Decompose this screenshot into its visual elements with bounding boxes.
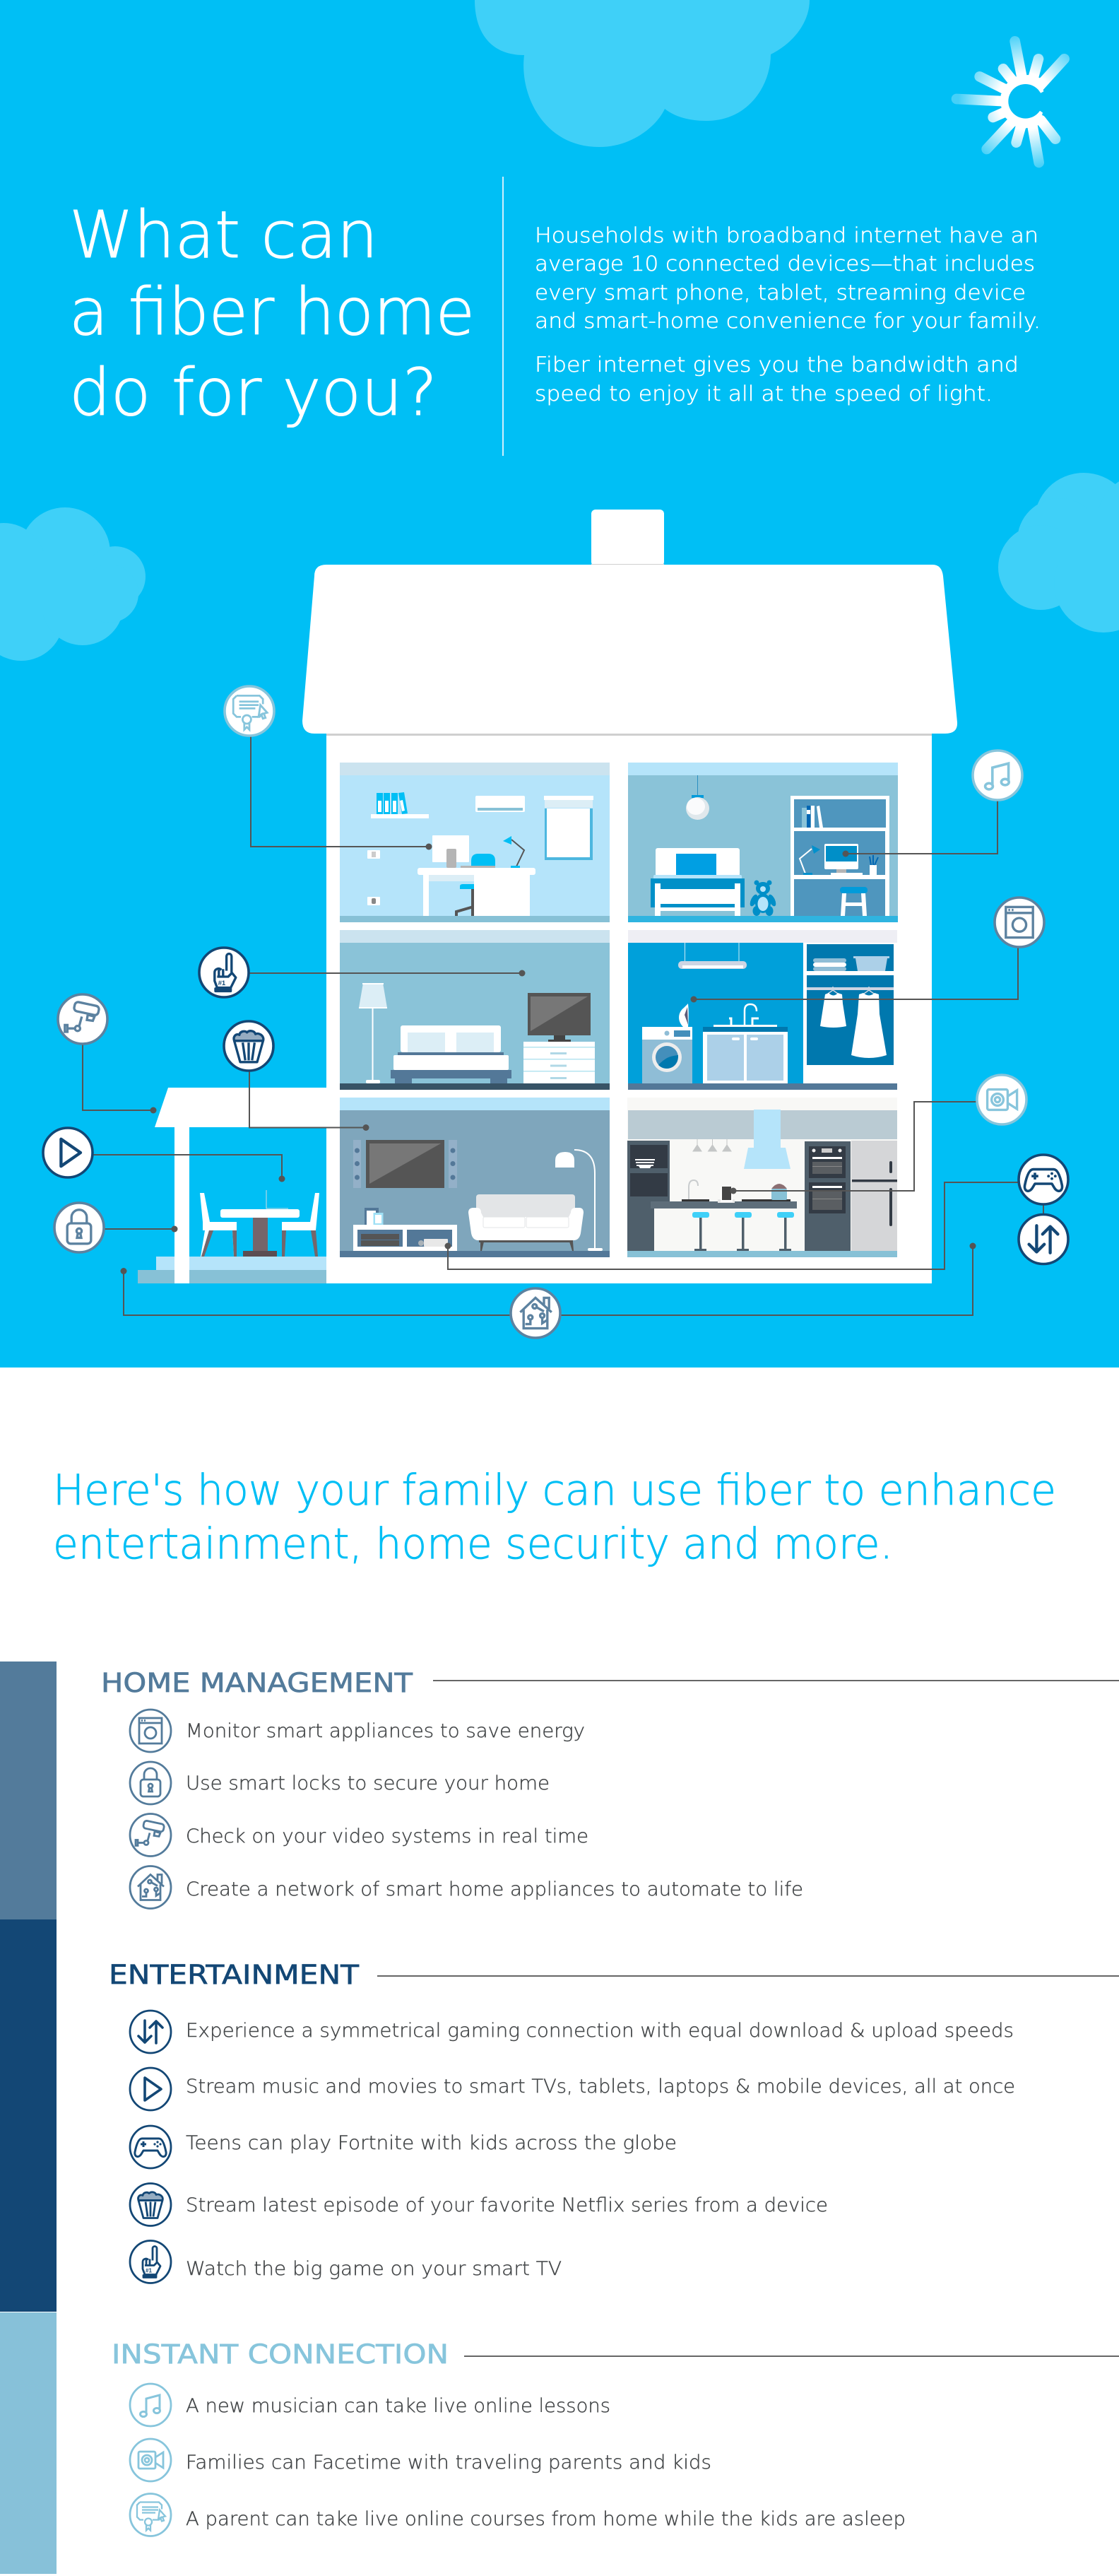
heading: ENTERTAINMENT xyxy=(109,1960,359,1990)
intro paragraph: average 10 connected devices—that includes xyxy=(535,252,1035,276)
item: netflix xyxy=(130,2184,828,2226)
color bar xyxy=(0,2312,57,2574)
roof xyxy=(302,565,957,734)
intro paragraph: speed to enjoy it all at the speed of light. xyxy=(535,382,993,406)
item: video systems: Check on your video systems in real time xyxy=(186,1825,588,1847)
section heading: entertainment, home security and more. xyxy=(53,1519,893,1569)
item: stream: Stream music and movies to smart TVs, tablets, laptops & mobile devices, all at once xyxy=(186,2076,1015,2098)
item: big game: Watch the big game on your smart TV xyxy=(186,2258,562,2280)
chimney xyxy=(591,510,664,566)
icon: foam hand xyxy=(199,948,249,997)
panel: entertainment xyxy=(0,1919,1119,2312)
intro paragraph: Households with broadband internet have an xyxy=(535,223,1038,247)
icon: washer xyxy=(995,898,1044,947)
title: do for you? xyxy=(69,355,437,430)
icon: video xyxy=(977,1075,1026,1124)
heading: HOME MANAGEMENT xyxy=(101,1668,413,1698)
intro paragraph: and smart-home convenience for your family. xyxy=(535,309,1041,333)
icon: up down arrows xyxy=(1019,1214,1068,1264)
divider xyxy=(502,177,504,456)
room: media room xyxy=(340,1098,610,1257)
item: appliances: Monitor smart appliances to save energy xyxy=(186,1720,585,1742)
section heading: Here's how your family can use fiber to enhance xyxy=(53,1466,1056,1515)
roof shadow line xyxy=(326,734,932,736)
house xyxy=(138,510,957,1283)
cloud: left xyxy=(0,507,146,661)
title xyxy=(69,197,475,430)
item: big game xyxy=(130,2240,562,2283)
connector lines xyxy=(83,735,1043,1315)
intro paragraph: Fiber internet gives you the bandwidth and xyxy=(535,353,1019,377)
icon: play xyxy=(43,1128,93,1177)
item: locks xyxy=(130,1762,550,1804)
icon: lock xyxy=(54,1203,104,1252)
item: courses xyxy=(130,2493,906,2536)
intro paragraph xyxy=(535,223,1041,406)
item: locks: Use smart locks to secure your home xyxy=(186,1772,550,1794)
house body xyxy=(326,734,932,1283)
room: kitchen xyxy=(627,1098,897,1257)
background: sky panel xyxy=(0,0,1119,1368)
title: a fiber home xyxy=(69,274,475,350)
item: fortnite xyxy=(130,2126,677,2168)
cloud: top xyxy=(475,0,810,147)
item: symmetrical: Experience a symmetrical gaming connection with equal download & upload speeds xyxy=(186,2020,1014,2042)
icon: music xyxy=(973,751,1022,800)
connector end dots xyxy=(120,844,976,1274)
item: netflix: Stream latest episode of your favorite Netflix series from a device xyxy=(186,2194,828,2216)
item: video systems xyxy=(130,1813,588,1856)
section heading xyxy=(53,1466,1056,1569)
room: laundry xyxy=(628,930,897,1090)
room: living room xyxy=(340,930,610,1090)
item: musician: A new musician can take live online lessons xyxy=(186,2395,610,2417)
heading: INSTANT CONNECTION xyxy=(112,2339,449,2370)
room: office xyxy=(340,763,610,922)
item: fortnite: Teens can play Fortnite with kids across the globe xyxy=(186,2132,677,2154)
panel: home management xyxy=(0,1662,1119,1919)
porch xyxy=(138,1088,326,1283)
icon: smart home xyxy=(511,1288,560,1338)
item: courses: A parent can take live online courses from home while the kids are asleep xyxy=(186,2508,906,2530)
color bar xyxy=(0,1662,57,1919)
cloud: right xyxy=(998,473,1119,633)
item: musician xyxy=(130,2384,610,2426)
item: appliances xyxy=(130,1710,585,1752)
item: facetime: Families can Facetime with traveling parents and kids xyxy=(186,2452,711,2474)
panel: instant connection xyxy=(0,2312,1119,2574)
icon: popcorn xyxy=(224,1021,273,1071)
logo: sunburst C xyxy=(957,41,1065,163)
item: network xyxy=(130,1866,803,1908)
icon: gamepad xyxy=(1019,1155,1068,1204)
intro paragraph: every smart phone, tablet, streaming device xyxy=(535,281,1026,305)
title: What can xyxy=(69,197,378,273)
icon: security camera xyxy=(58,994,107,1044)
item: stream xyxy=(130,2068,1015,2110)
room: bedroom xyxy=(628,763,898,922)
item: facetime xyxy=(130,2439,711,2481)
item: symmetrical xyxy=(130,2011,1014,2053)
item: network: Create a network of smart home appliances to automate to life xyxy=(186,1878,803,1900)
icon: certificate xyxy=(225,686,274,736)
color bar xyxy=(0,1919,57,2312)
